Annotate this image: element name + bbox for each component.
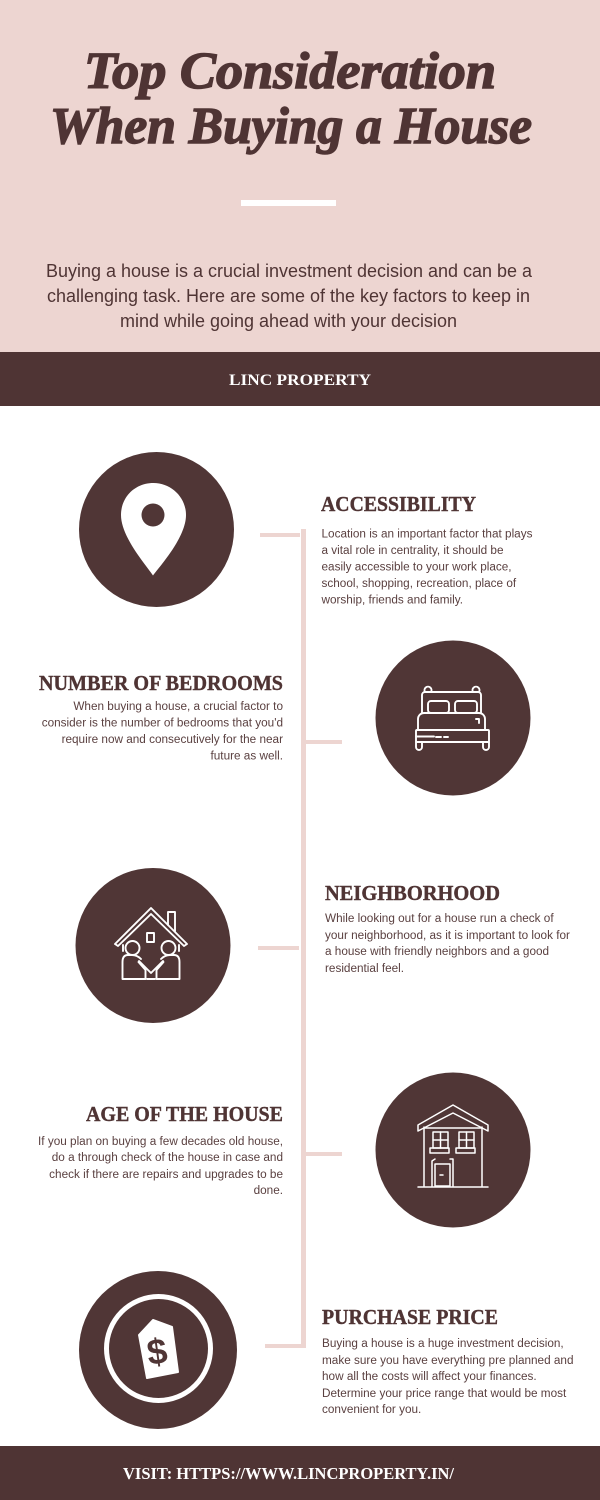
icon: bed — [376, 640, 530, 796]
text: number of bedrooms: consider is the number of bedrooms that you'd — [42, 716, 283, 730]
title: When Buying a House — [50, 98, 532, 155]
timeline connector — [258, 529, 342, 1348]
text: neighborhood — [325, 881, 570, 975]
intro text: challenging task. Here are some of the key factors to keep in — [47, 286, 530, 306]
white divider — [241, 200, 336, 206]
text: purchase price — [322, 1305, 573, 1416]
text: age of the house: check if there are repairs and upgrades to be — [49, 1168, 283, 1181]
text: number of bedrooms — [39, 671, 283, 762]
text: number of bedrooms: When buying a house, a crucial factor to — [73, 700, 283, 713]
icon: location pin — [79, 452, 234, 607]
footer banner: VISIT: HTTPS://WWW.LINCPROPERTY.IN/ — [123, 1464, 454, 1483]
text: accessibility: ACCESSIBILITY — [321, 492, 476, 516]
text: age of the house: done. — [254, 1184, 283, 1197]
text: purchase price: Buying a house is a huge investment decision, — [322, 1337, 564, 1350]
text: purchase price: PURCHASE PRICE — [322, 1305, 498, 1329]
text: age of the house — [38, 1102, 283, 1197]
text: number of bedrooms: future as well. — [210, 750, 283, 762]
text: purchase price: make sure you have everything pre planned and — [322, 1354, 573, 1367]
intro text: Buying a house is a crucial investment decision and can be a — [46, 261, 533, 281]
text: number of bedrooms: require now and consecutively for the near — [62, 733, 283, 746]
title — [50, 43, 532, 155]
brand banner: LINC PROPERTY — [229, 372, 371, 389]
text: accessibility: school, shopping, recreation, place of — [322, 577, 517, 590]
text: accessibility: easily accessible to your work place, — [322, 560, 512, 574]
icon: two-storey house — [376, 1072, 530, 1228]
text: accessibility: Location is an important factor that plays — [322, 528, 533, 540]
text: neighborhood: your neighborhood, as it is important to look for — [325, 929, 570, 942]
header panel — [0, 0, 600, 352]
text: neighborhood: residential feel. — [325, 962, 404, 975]
text: purchase price: how all the costs will affect your finances. — [322, 1370, 537, 1383]
text: purchase price: Determine your price range that would be most — [322, 1387, 567, 1400]
text: neighborhood: NEIGHBORHOOD — [325, 881, 500, 905]
icon: price tag — [79, 1271, 237, 1429]
intro text: mind while going ahead with your decision — [120, 311, 457, 331]
footer banner — [0, 1446, 600, 1500]
text: age of the house: do a through check of the house in case and — [52, 1151, 283, 1164]
icon: neighborhood house — [76, 868, 230, 1023]
intro text — [46, 261, 533, 331]
title: Top Consideration — [84, 43, 496, 100]
text: neighborhood: a house with friendly neighbors and a good — [325, 945, 549, 958]
text: age of the house: AGE OF THE HOUSE — [86, 1102, 283, 1126]
brand banner — [0, 352, 600, 406]
text: neighborhood: While looking out for a house run a check of — [325, 912, 554, 925]
text: purchase price: convenient for you. — [322, 1403, 421, 1416]
icon: price tag: $ — [144, 1330, 170, 1373]
text: accessibility: worship, friends and family. — [320, 594, 463, 606]
text: age of the house: If you plan on buying a few decades old house, — [38, 1135, 283, 1148]
text: accessibility — [320, 492, 533, 606]
text: number of bedrooms: NUMBER OF BEDROOMS — [39, 671, 283, 695]
text: accessibility: a vital role in centrality, it should be — [322, 544, 504, 557]
